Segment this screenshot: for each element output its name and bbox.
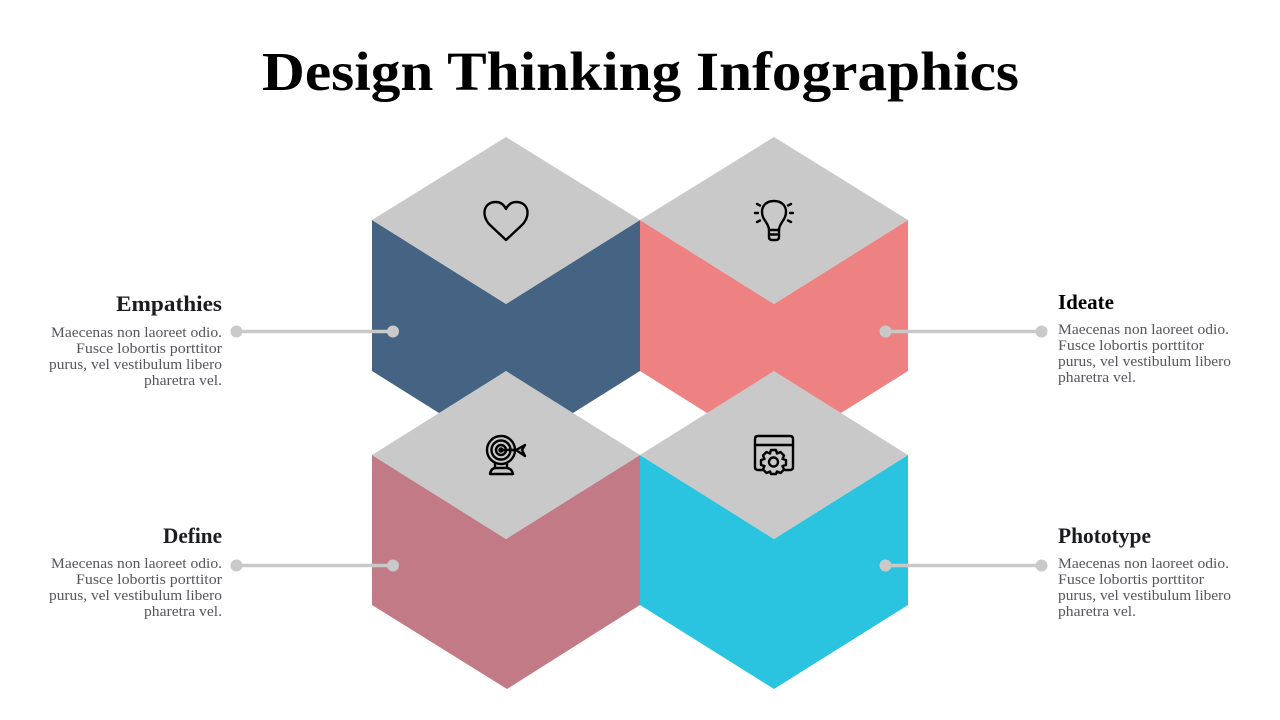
text block: phototype: Maecenas non laoreet odio. — [1058, 556, 1229, 572]
text block: ideate: Ideate — [1058, 290, 1114, 314]
text block: define: pharetra vel. — [144, 604, 222, 620]
icon: browser window with gear — [755, 436, 793, 474]
text block: phototype: pharetra vel. — [1058, 604, 1136, 620]
text block: empathies: Empathies — [116, 291, 222, 316]
connector: ideate — [880, 326, 1048, 338]
text block: empathies — [49, 291, 222, 389]
icon: target with arrow — [487, 436, 525, 474]
text block: define: Maecenas non laoreet odio. — [51, 556, 222, 572]
text block: define — [49, 523, 222, 620]
text block: phototype — [1058, 523, 1231, 620]
connector: empathies — [230, 326, 399, 338]
text block: phototype: purus, vel vestibulum libero — [1058, 588, 1231, 604]
text block: ideate: pharetra vel. — [1058, 370, 1136, 386]
text block: ideate: Maecenas non laoreet odio. — [1058, 322, 1229, 338]
text block: phototype: Fusce lobortis porttitor — [1058, 572, 1204, 588]
icon: light bulb — [755, 201, 793, 240]
hexagon: define — [372, 371, 640, 689]
icon: heart — [484, 202, 528, 240]
text block: phototype: Phototype — [1058, 523, 1151, 548]
text block: ideate — [1058, 290, 1231, 386]
text block: ideate: purus, vel vestibulum libero — [1058, 354, 1231, 370]
text block: empathies: purus, vel vestibulum libero — [49, 357, 222, 373]
hexagon: prototype — [640, 371, 908, 689]
hexagon: empathies — [372, 137, 640, 455]
text block: empathies: Maecenas non laoreet odio. — [51, 325, 222, 341]
text block: define: Fusce lobortis porttitor — [76, 572, 222, 588]
connector: prototype — [880, 560, 1048, 572]
connector: define — [230, 560, 399, 572]
text block: define: purus, vel vestibulum libero — [49, 588, 222, 604]
title: Design Thinking Infographics — [262, 41, 1019, 102]
hexagon: ideate — [640, 137, 908, 455]
text block: ideate: Fusce lobortis porttitor — [1058, 338, 1204, 354]
text block: empathies: Fusce lobortis porttitor — [76, 341, 222, 357]
text block: define: Define — [163, 523, 222, 548]
text block: empathies: pharetra vel. — [144, 373, 222, 389]
